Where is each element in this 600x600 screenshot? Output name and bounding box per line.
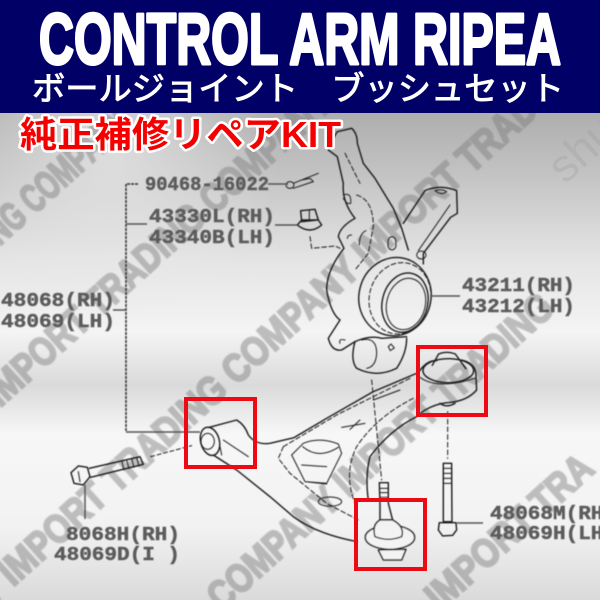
part numbers: 48068 / 48069: 48068(RH) bbox=[1, 290, 115, 312]
subtitle: ボールジョイント ブッシュセット bbox=[32, 70, 564, 107]
icon: front bolt bbox=[372, 380, 457, 536]
red heading with white outline: 純正補修リペアKIT bbox=[20, 114, 341, 155]
small parts and leaders bbox=[71, 173, 483, 536]
part numbers: 43211 / 43212: 43212(LH) bbox=[462, 296, 575, 318]
front bushing top bbox=[418, 352, 477, 415]
leader lines bbox=[85, 184, 483, 523]
part numbers: 43330L / 43340B: 43340B(LH) bbox=[149, 227, 275, 249]
diagram: exploded suspension parts bbox=[71, 128, 483, 560]
part numbers: 48068 / 48069: 48069(LH) bbox=[1, 311, 115, 333]
lower control arm bbox=[197, 352, 477, 560]
part numbers: 48068H / 48069D: 48069D(I ) bbox=[54, 544, 180, 566]
callout: red box rear bushing bbox=[186, 399, 255, 467]
part numbers: 43330L / 43340B: 43330L(RH) bbox=[149, 206, 275, 228]
part numbers: 48068H / 48069D bbox=[54, 524, 180, 566]
icon: rear bolt bbox=[71, 446, 192, 485]
callout: red box ball joint bbox=[356, 500, 425, 569]
icon: clip bbox=[286, 173, 318, 188]
part numbers: 43211 / 43212 bbox=[462, 275, 575, 318]
part number: 90468-16022: 90468-16022 bbox=[145, 174, 269, 196]
callout: red box front bushing bbox=[418, 347, 486, 415]
panel: header band bbox=[0, 0, 600, 113]
part numbers: 48068M / 48069H bbox=[490, 503, 600, 545]
steering knuckle bbox=[327, 128, 457, 373]
part numbers: 43330L / 43340B bbox=[149, 206, 275, 249]
part numbers: 48068 / 48069 bbox=[1, 290, 115, 333]
part numbers: 48068H / 48069D: 8068H(RH) bbox=[66, 524, 180, 546]
ball joint bbox=[365, 483, 415, 560]
icon: castle nut bbox=[297, 209, 340, 248]
part numbers: 43211 / 43212: 43211(RH) bbox=[462, 275, 575, 297]
part labels group bbox=[1, 174, 600, 566]
